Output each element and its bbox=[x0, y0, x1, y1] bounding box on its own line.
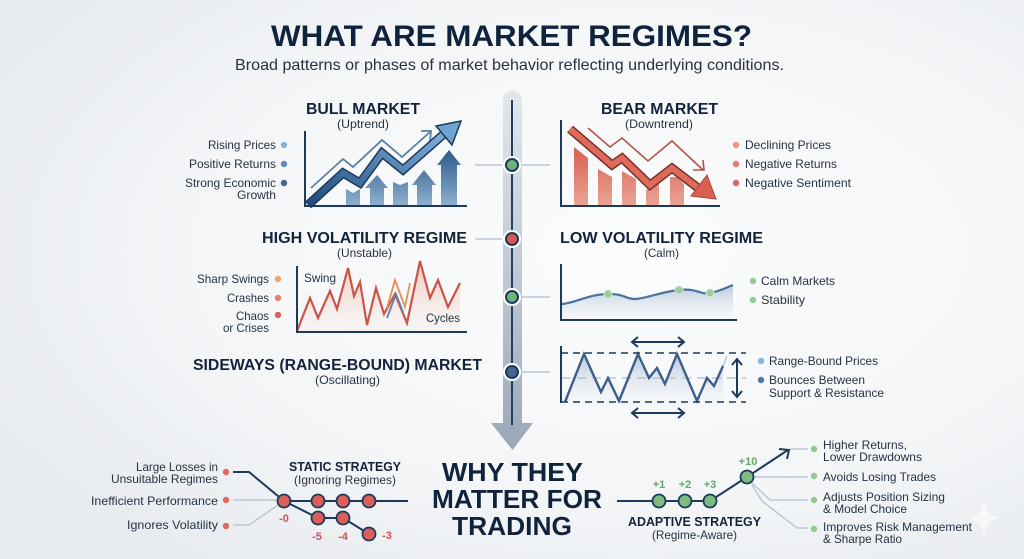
panel: adaptive strategy bbox=[617, 438, 973, 546]
chart: adaptive strategy path bbox=[617, 449, 808, 528]
node: high volatility bbox=[503, 230, 521, 248]
node: low volatility bbox=[503, 288, 521, 306]
subheading: calm: (Calm) bbox=[644, 246, 679, 260]
list: adaptive benefits: Improves Risk Management bbox=[823, 520, 973, 534]
panel: low volatility regime bbox=[560, 230, 835, 320]
chart: adaptive strategy path: +1 bbox=[653, 479, 665, 491]
list: bull traits: Rising Prices bbox=[208, 138, 276, 152]
list: high volatility traits: Chaos bbox=[236, 309, 269, 323]
list: low volatility traits: Stability bbox=[761, 293, 805, 307]
list: bull traits: Strong Economic bbox=[185, 176, 276, 190]
list: bear traits: Declining Prices bbox=[745, 138, 831, 152]
list: adaptive benefits bbox=[811, 438, 973, 546]
heading: bear market: BEAR MARKET bbox=[601, 101, 719, 118]
chart: adaptive strategy path: +2 bbox=[679, 479, 691, 491]
list: range-bound traits bbox=[758, 354, 884, 400]
chart: high volatility bbox=[297, 261, 467, 332]
panel: static strategy bbox=[91, 459, 408, 543]
subtitle: Broad patterns or phases of market behavior reflecting underlying conditions. bbox=[235, 57, 784, 74]
heading: static strategy: STATIC STRATEGY bbox=[289, 459, 401, 474]
list: static drawbacks: Inefficient Performance bbox=[91, 494, 218, 508]
list: adaptive benefits: & Sharpe Ratio bbox=[823, 532, 902, 546]
heading: why they matter for trading: TRADING bbox=[452, 511, 572, 541]
chart: bear market bbox=[561, 120, 720, 206]
list: high volatility traits: Crashes bbox=[227, 291, 269, 305]
list: high volatility traits: or Crises bbox=[223, 321, 269, 335]
label: swing: Swing bbox=[304, 271, 336, 285]
list: high volatility traits: Sharp Swings bbox=[197, 272, 269, 286]
list: bear traits bbox=[733, 138, 852, 190]
chart: static strategy path: -0 bbox=[279, 513, 289, 525]
chart: adaptive strategy path: +10 bbox=[739, 456, 757, 468]
chart: static strategy path: -5 bbox=[312, 531, 322, 543]
panel: sideways market bbox=[193, 337, 884, 418]
list: high volatility traits bbox=[197, 272, 281, 335]
node: sideways bbox=[503, 363, 521, 381]
chart: static strategy path: -4 bbox=[338, 531, 349, 543]
icon: sparkle watermark bbox=[967, 501, 1001, 536]
list: adaptive benefits: Lower Drawdowns bbox=[823, 450, 922, 464]
chart: static strategy path: -3 bbox=[382, 530, 392, 542]
list: static drawbacks: Large Losses in bbox=[136, 460, 218, 474]
list: bear traits: Negative Returns bbox=[745, 157, 837, 171]
list: adaptive benefits: & Model Choice bbox=[823, 502, 907, 516]
panel: bear market bbox=[561, 101, 852, 206]
list: adaptive benefits: Adjusts Position Sizing bbox=[823, 490, 945, 504]
list: bull traits bbox=[185, 138, 287, 202]
chart: static strategy path bbox=[233, 472, 408, 543]
list: range-bound traits: Range-Bound Prices bbox=[769, 354, 878, 368]
list: low volatility traits: Calm Markets bbox=[761, 274, 835, 288]
heading: why they matter for trading bbox=[432, 457, 602, 541]
list: static drawbacks: Unsuitable Regimes bbox=[111, 472, 218, 486]
heading: bull market: BULL MARKET bbox=[306, 101, 421, 118]
list: static drawbacks: Ignores Volatility bbox=[127, 518, 218, 532]
central timeline arrow bbox=[475, 90, 550, 450]
label: cycles: Cycles bbox=[426, 311, 460, 325]
list: range-bound traits: Support & Resistance bbox=[769, 386, 884, 400]
subheading: unstable: (Unstable) bbox=[337, 246, 392, 260]
arrow: bottom range bbox=[632, 408, 684, 418]
list: bull traits: Growth bbox=[237, 188, 276, 202]
heading: why they matter for trading: WHY THEY bbox=[442, 457, 583, 487]
subheading: uptrend: (Uptrend) bbox=[337, 117, 389, 131]
chart: adaptive strategy path: +3 bbox=[704, 479, 716, 491]
list: adaptive benefits: Higher Returns, bbox=[823, 438, 907, 452]
list: range-bound traits: Bounces Between bbox=[769, 373, 865, 387]
panel: bull market bbox=[185, 101, 467, 206]
subheading: regime-aware: (Regime-Aware) bbox=[652, 528, 737, 542]
subheading: downtrend: (Downtrend) bbox=[625, 117, 693, 131]
chart: bull market bbox=[305, 121, 467, 206]
list: low volatility traits bbox=[750, 274, 835, 307]
subheading: oscillating: (Oscillating) bbox=[315, 373, 380, 387]
title: WHAT ARE MARKET REGIMES? bbox=[271, 20, 752, 53]
heading: sideways: SIDEWAYS (RANGE-BOUND) MARKET bbox=[193, 357, 483, 374]
arrow: vertical range bbox=[732, 359, 742, 397]
list: bear traits: Negative Sentiment bbox=[745, 176, 852, 190]
heading: adaptive strategy: ADAPTIVE STRATEGY bbox=[628, 514, 761, 529]
list: static drawbacks bbox=[91, 460, 229, 532]
chart: range-bound bbox=[561, 337, 746, 418]
subheading: ignoring regimes: (Ignoring Regimes) bbox=[294, 473, 396, 487]
arrow: top range bbox=[632, 337, 684, 347]
chart: low volatility bbox=[561, 264, 737, 320]
list: adaptive benefits: Avoids Losing Trades bbox=[823, 470, 936, 484]
panel: high volatility regime bbox=[197, 230, 467, 335]
node: bull and bear bbox=[503, 156, 521, 174]
list: bull traits: Positive Returns bbox=[189, 157, 276, 171]
heading: low volatility: LOW VOLATILITY REGIME bbox=[560, 230, 763, 247]
heading: why they matter for trading: MATTER FOR bbox=[432, 484, 602, 514]
heading: high volatility: HIGH VOLATILITY REGIME bbox=[262, 230, 467, 247]
